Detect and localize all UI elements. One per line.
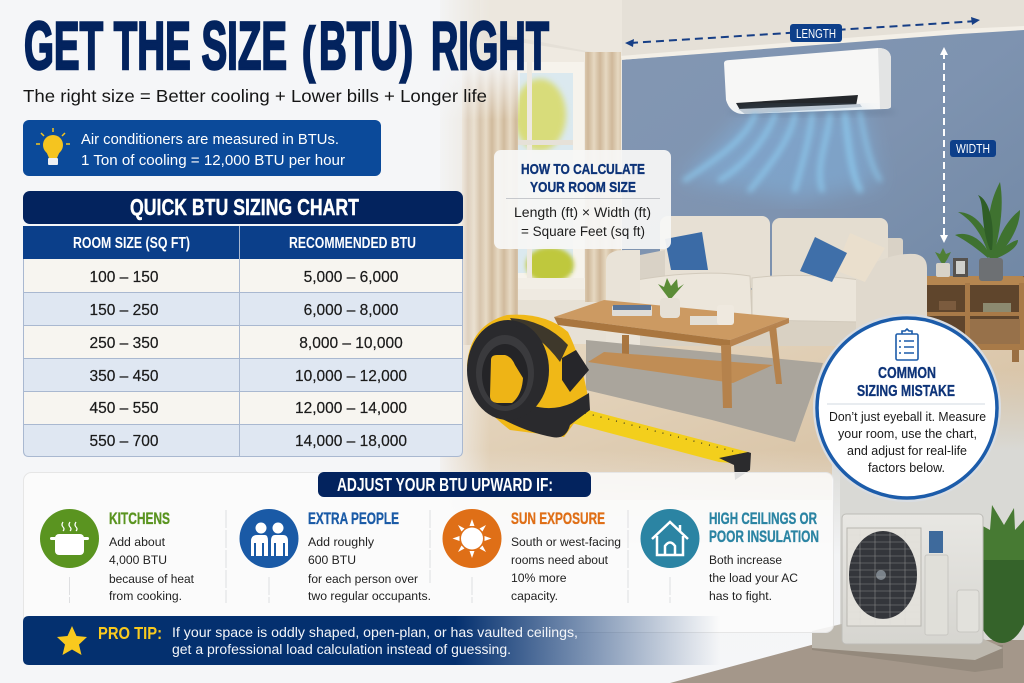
tape measure [467,315,751,480]
table rows: 10,000 – 12,000 [295,368,407,385]
sizing chart table [23,191,463,457]
factor: high ceilings or poor insulation: HIGH CEILINGS OR [709,509,817,528]
pro tip banner: If your space is oddly shaped, open-plan, or has vaulted ceilings, [172,625,578,641]
lower fade [440,450,840,683]
info box [23,120,381,176]
coffee table [554,278,789,408]
factor: kitchens: because of heat [109,572,195,586]
wall AC unit [724,48,896,117]
panel: adjust your BTU upward [24,472,834,632]
icon: people [240,509,298,568]
pro tip banner [23,616,720,665]
panel: how to calculate [494,150,671,249]
lower wall [832,450,1024,642]
title: ) [400,16,413,83]
panel heading: ADJUST YOUR BTU UPWARD IF: [337,475,553,495]
background room scene [440,0,1024,683]
title: RIGHT [431,8,549,84]
factor: extra people [240,509,431,603]
pro tip banner: PRO TIP: [98,623,162,643]
factor: high ceilings or poor insulation [640,509,819,603]
factor: sun exposure: SUN EXPOSURE [511,509,605,528]
panel: how to calculate: Length (ft) × Width (ft) [514,205,651,220]
factor: sun exposure: capacity. [511,589,558,603]
title: GET THE SIZE [24,8,287,84]
callout: common sizing mistake: SIZING MISTAKE [857,383,955,400]
panel: how to calculate: = Square Feet (sq ft) [521,224,645,239]
table rows: 550 – 700 [90,433,159,450]
table rows: 8,000 – 10,000 [299,335,403,352]
table rows: 14,000 – 18,000 [295,433,407,450]
column headers: RECOMMENDED BTU [289,235,416,252]
table rows: 12,000 – 14,000 [295,400,407,417]
factor: kitchens: KITCHENS [109,509,170,528]
icon: light bulb [36,128,70,165]
shelf with plant and decor [916,182,1024,362]
factor: extra people: EXTRA PEOPLE [308,509,399,528]
factor: sun exposure: 10% more [511,571,567,585]
curtains [462,52,621,345]
info text [81,132,345,169]
label: width: WIDTH [956,141,990,156]
blue wall [620,29,1024,330]
panel: how to calculate: HOW TO CALCULATE [521,161,645,178]
icon: cooking pot [40,509,99,568]
title: ( [302,16,315,83]
callout: common sizing mistake [813,314,1001,502]
sofa [606,216,927,347]
factor: high ceilings or poor insulation: Both increase [709,553,782,567]
info text: Air conditioners are measured in BTUs. [81,132,339,148]
table rows: 450 – 550 [90,400,159,417]
table rows [23,226,463,457]
picture frame [953,258,968,277]
info text: 1 Ton of cooling = 12,000 BTU per hour [81,153,345,169]
pro tip banner: get a professional load calculation instead of guessing. [172,642,511,658]
table rows: 150 – 250 [90,302,159,319]
factor: kitchens: Add about [109,535,166,549]
cushions [665,232,708,270]
ceiling [480,0,1024,59]
title: BTU [319,8,398,84]
chart heading [23,191,463,224]
body [467,315,589,437]
factor: extra people: two regular occupants. [308,589,431,603]
callout: common sizing mistake: factors below. [868,461,945,475]
factor: extra people: Add roughly [308,535,375,549]
window [505,40,622,300]
factor: kitchens: 4,000 BTU [109,553,167,567]
left fade [0,0,490,683]
outdoor AC unit [842,514,983,644]
table rows: 250 – 350 [90,335,159,352]
cold airflow [680,112,880,200]
tape blade [568,410,748,464]
column headers: ROOM SIZE (SQ FT) [73,235,190,252]
label: length: LENGTH [796,26,836,41]
factor: high ceilings or poor insulation: POOR INSULATION [709,527,819,546]
table rows: 5,000 – 6,000 [304,269,399,286]
label: length [790,24,842,42]
panel heading [318,472,591,497]
outdoor area [670,505,1024,683]
chart heading: QUICK BTU SIZING CHART [130,194,359,220]
callout: common sizing mistake: Don’t just eyeball it. Measure [829,410,986,424]
icon: star [57,626,87,655]
table rows: 100 – 150 [90,269,159,286]
callout: common sizing mistake: and adjust for real-life [847,444,967,458]
table plant [658,278,684,300]
icon: house [640,509,700,568]
factor: extra people: 600 BTU [308,553,356,567]
length arrow [625,17,980,47]
panel: how to calculate: YOUR ROOM SIZE [530,179,636,196]
callout: common sizing mistake: COMMON [878,365,936,382]
width arrow [940,47,996,243]
top left fade over curtain [440,60,520,120]
table rows: 6,000 – 8,000 [304,302,399,319]
factor: sun exposure: rooms need about [511,553,609,567]
subtitle: The right size = Better cooling + Lower bills + Longer life [23,86,487,106]
bush [972,505,1024,643]
callout: common sizing mistake: your room, use the chart, [838,427,977,441]
icon: sun [442,509,502,568]
factor: kitchens [40,509,195,603]
table rows: 350 – 450 [90,368,159,385]
factor: sun exposure [442,509,621,603]
factor: sun exposure: South or west-facing [511,535,621,549]
column headers [23,226,463,259]
rug [586,340,823,442]
potted plant large [955,182,1020,260]
potted plant small [935,248,951,265]
icon: clipboard [896,329,918,360]
factor: kitchens: from cooking. [109,589,182,603]
floor [440,290,1024,500]
factor: extra people: for each person over [308,572,418,586]
factor: high ceilings or poor insulation: the load your AC [709,571,798,585]
factor: high ceilings or poor insulation: has to fight. [709,589,772,603]
